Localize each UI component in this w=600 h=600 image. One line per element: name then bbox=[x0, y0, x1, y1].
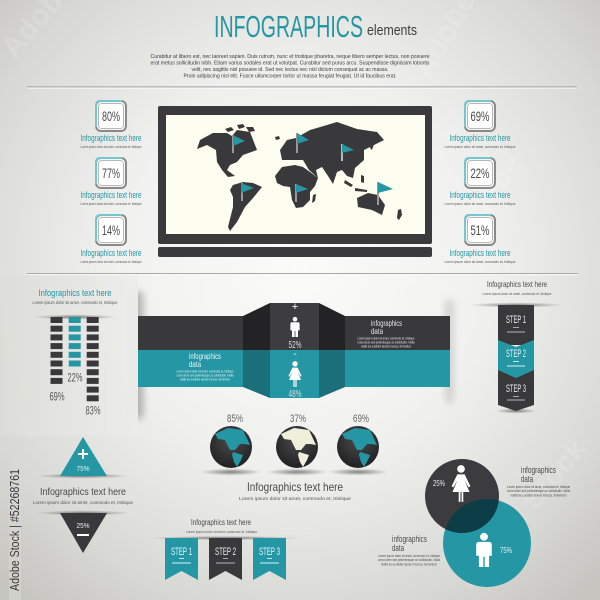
bottom step ribbons bbox=[165, 538, 286, 580]
bar column 69%: 69% bbox=[50, 390, 65, 404]
triangle block heading: Lorem ipsum dolor sit amet, commodo et, tristique bbox=[33, 500, 134, 505]
globes heading bbox=[239, 480, 351, 501]
globes heading: Infographics text here bbox=[247, 480, 343, 494]
badge 69% bbox=[444, 101, 516, 149]
band text left bbox=[176, 352, 234, 382]
badge 22%: Infographics text here bbox=[450, 190, 510, 200]
dark band bbox=[138, 316, 450, 350]
shadow above bottom ribbons bbox=[150, 536, 300, 540]
right percent badges bbox=[444, 101, 516, 264]
triangle 25%: 25% bbox=[76, 521, 90, 530]
badge 51%: Infographics text here bbox=[450, 248, 510, 258]
left percent badges bbox=[80, 101, 142, 264]
bar column 22%: 22% bbox=[68, 370, 83, 384]
gender ribbon band bbox=[138, 300, 453, 403]
female icon bbox=[452, 465, 470, 502]
flag: Asia bbox=[341, 144, 354, 161]
ribbon step 3: STEP 3 bbox=[259, 546, 280, 558]
badge 51%: 51% bbox=[470, 222, 490, 238]
steps heading right: Infographics text here bbox=[487, 279, 547, 289]
25% label: 25% bbox=[433, 478, 445, 488]
triangle block heading: Infographics text here bbox=[40, 486, 126, 498]
venn text right: data bbox=[521, 474, 533, 484]
ribbon step 1: STEP 1 bbox=[171, 546, 192, 558]
dark circle bbox=[425, 459, 499, 533]
badge 14%: Lorem ipsum dolor sit amet, commodo et, tristique bbox=[80, 259, 142, 264]
bottom ribbons heading: Infographics text here bbox=[191, 518, 251, 527]
triangle 25% bbox=[37, 510, 129, 553]
globe 37%: 37% bbox=[290, 413, 306, 425]
band text right bbox=[358, 319, 414, 348]
band text left: mattis leo curabitur laoreet rhoncus, fermentum bbox=[180, 378, 230, 382]
fold wings bbox=[243, 303, 345, 350]
vertical steps ribbon bbox=[496, 305, 536, 414]
title: INFOGRAPHICS bbox=[214, 9, 363, 44]
globe 85% bbox=[201, 413, 261, 476]
venn text left: infographics bbox=[392, 534, 427, 544]
shadow under panel heading bbox=[33, 314, 117, 320]
venn text left: mattis leo curabitur laoreet rhoncus, fermentum bbox=[381, 562, 437, 566]
intro paragraph: Curabitur at libero est, nec laoreet sapien. Duis rutrum, nunc et tristique pharetra, neque libero semper lectus, non posuere bbox=[150, 54, 430, 60]
75% label: 75% bbox=[500, 545, 512, 555]
shadow above steps ribbon bbox=[469, 302, 563, 308]
flag: North America bbox=[232, 135, 245, 153]
badge 77% bbox=[80, 158, 142, 206]
world map bbox=[197, 122, 402, 231]
venn text right: Lorem ipsum dolor sit amet, commodo et, tristique bbox=[507, 485, 570, 489]
female icon and 48% bbox=[288, 349, 302, 400]
badge 69%: Lorem ipsum dolor sit amet, commodo et, tristique bbox=[444, 144, 516, 149]
stock watermarks: Adobe bbox=[449, 149, 529, 244]
globe 69%: 69% bbox=[353, 413, 369, 425]
panel heading bbox=[32, 288, 118, 305]
band text right: infographics bbox=[371, 319, 402, 328]
step 1: STEP 1 bbox=[506, 314, 526, 326]
stock watermarks: Adobe Stock bbox=[450, 433, 593, 594]
band text right: urna lorem sed pellentesque ac sollicitudin. Nulla bbox=[358, 340, 414, 344]
stock id strip: Adobe Stock | #52268761 bbox=[8, 469, 22, 591]
female icon and 48%: 48% bbox=[288, 389, 302, 400]
badge 22%: 22% bbox=[470, 165, 490, 181]
bottom ribbons heading bbox=[186, 518, 257, 534]
globe 37% bbox=[267, 413, 327, 476]
laptop with world map bbox=[158, 106, 432, 257]
venn text right: mattis leo curabitur laoreet rhoncus, fermentum bbox=[510, 494, 566, 498]
badge 14%: Infographics text here bbox=[80, 248, 142, 258]
flag: South America bbox=[241, 183, 254, 201]
title: elements bbox=[367, 22, 417, 39]
band text right: mattis leo curabitur laoreet rhoncus, fermentum bbox=[361, 344, 411, 348]
venn text left: Lorem ipsum dolor sit amet, commodo et, tristique bbox=[378, 554, 440, 558]
screen bbox=[166, 115, 425, 234]
badge 69%: Infographics text here bbox=[450, 133, 510, 143]
female icon and 48%: - bbox=[293, 349, 297, 360]
venn text left: data bbox=[392, 543, 404, 553]
flag: Europe bbox=[296, 133, 309, 153]
badge 51%: Lorem ipsum dolor sit amet, commodo et, tristique bbox=[444, 259, 516, 264]
step 3: STEP 3 bbox=[506, 383, 526, 395]
flag: Australia bbox=[377, 182, 393, 205]
badge 80%: 80% bbox=[102, 108, 120, 124]
screen bezel bbox=[158, 106, 432, 244]
bottom ribbons heading: Lorem ipsum dolor sit amet, commodo et, tristique bbox=[186, 530, 257, 534]
stock watermarks: Adobe Stock bbox=[280, 263, 423, 424]
badge 14%: 14% bbox=[102, 222, 120, 238]
globe 69% bbox=[328, 413, 388, 476]
step 2: STEP 2 bbox=[506, 348, 526, 360]
triangle 75% bbox=[37, 437, 129, 478]
overlap bbox=[445, 499, 499, 533]
teal circle bbox=[443, 499, 531, 587]
centre panel bbox=[270, 303, 319, 350]
panel heading: Infographics text here bbox=[38, 288, 112, 298]
male icon bbox=[476, 533, 492, 567]
band text left: Lorem ipsum dolor sit amet, commodo et, tristique bbox=[176, 370, 234, 374]
intro paragraph: erat metus sollicitudin nibh. Etiam varius sodales erat ut volutpat. Curabitur sed purus arcu. Suspendisse dignissim lobortis bbox=[150, 60, 430, 66]
badge 14% bbox=[80, 215, 142, 264]
band text right: data bbox=[371, 327, 383, 336]
triangle 75%: 75% bbox=[76, 464, 90, 473]
steps heading right: Lorem ipsum dolor sit amet, commodo et, tristique bbox=[482, 292, 552, 296]
bar column 83%: 83% bbox=[86, 404, 101, 418]
venn diagram bbox=[425, 459, 531, 587]
globes heading: Lorem ipsum dolor sit amet, commodo et, tristique bbox=[239, 496, 351, 501]
band text right: Lorem ipsum dolor sit amet, commodo et, tristique bbox=[358, 336, 414, 340]
badge 77%: 77% bbox=[102, 165, 120, 181]
venn text left bbox=[378, 534, 440, 566]
left folded panel bbox=[0, 275, 143, 435]
badge 22%: Lorem ipsum dolor sit amet, commodo et, tristique bbox=[444, 201, 516, 206]
male icon and 52% bbox=[288, 301, 302, 351]
panel heading: Lorem ipsum dolor sit amet, commodo et, tristique bbox=[32, 300, 118, 305]
venn text right: infographics bbox=[521, 465, 556, 475]
badge 69%: 69% bbox=[470, 108, 490, 124]
stock watermarks: Adobe Stock bbox=[220, 93, 363, 254]
band text left: infographics bbox=[189, 352, 221, 361]
intro paragraph bbox=[150, 54, 430, 80]
badge 77%: Lorem ipsum dolor sit amet, commodo et, tristique bbox=[80, 201, 142, 206]
laptop base bbox=[158, 247, 432, 257]
badge 80% bbox=[80, 101, 142, 149]
stock watermarks: Adobe Stock bbox=[10, 283, 153, 444]
steps heading right bbox=[482, 279, 552, 296]
intro paragraph: Proin adipiscing nisl elit. Fusce ullamcorper tortor ut massa feugiat feugiat. Ut id faucibus erat. bbox=[184, 74, 396, 80]
male icon and 52%: 52% bbox=[288, 340, 302, 351]
venn text right: urna lorem sed pellentesque ac sollicitudin. Nulla bbox=[507, 489, 570, 493]
badge 77%: Infographics text here bbox=[80, 190, 142, 200]
venn text left: urna lorem sed pellentesque ac sollicitudin. Nulla bbox=[378, 558, 440, 562]
band text left: urna lorem sed pellentesque ac sollicitudin. Nulla bbox=[176, 374, 234, 378]
ribbon step 2: STEP 2 bbox=[215, 546, 236, 558]
flag: Africa bbox=[295, 184, 308, 202]
teal band bbox=[138, 350, 450, 387]
badge 51% bbox=[444, 215, 516, 264]
venn text right bbox=[507, 465, 570, 498]
globes row bbox=[201, 413, 388, 476]
male icon and 52%: + bbox=[292, 301, 298, 313]
badge 22% bbox=[444, 158, 516, 206]
globe 85%: 85% bbox=[227, 413, 243, 425]
badge 80%: Lorem ipsum dolor sit amet, commodo et, tristique bbox=[80, 144, 142, 149]
band text left: data bbox=[189, 360, 201, 369]
triangle block heading bbox=[33, 486, 134, 505]
stacked bar chart bbox=[50, 317, 101, 418]
badge 80%: Infographics text here bbox=[80, 133, 142, 143]
intro paragraph: velit, nec sagittis nisl posuere id. Sed nec lectus nec nisl dictum consequat ac ac massa. bbox=[192, 67, 388, 73]
